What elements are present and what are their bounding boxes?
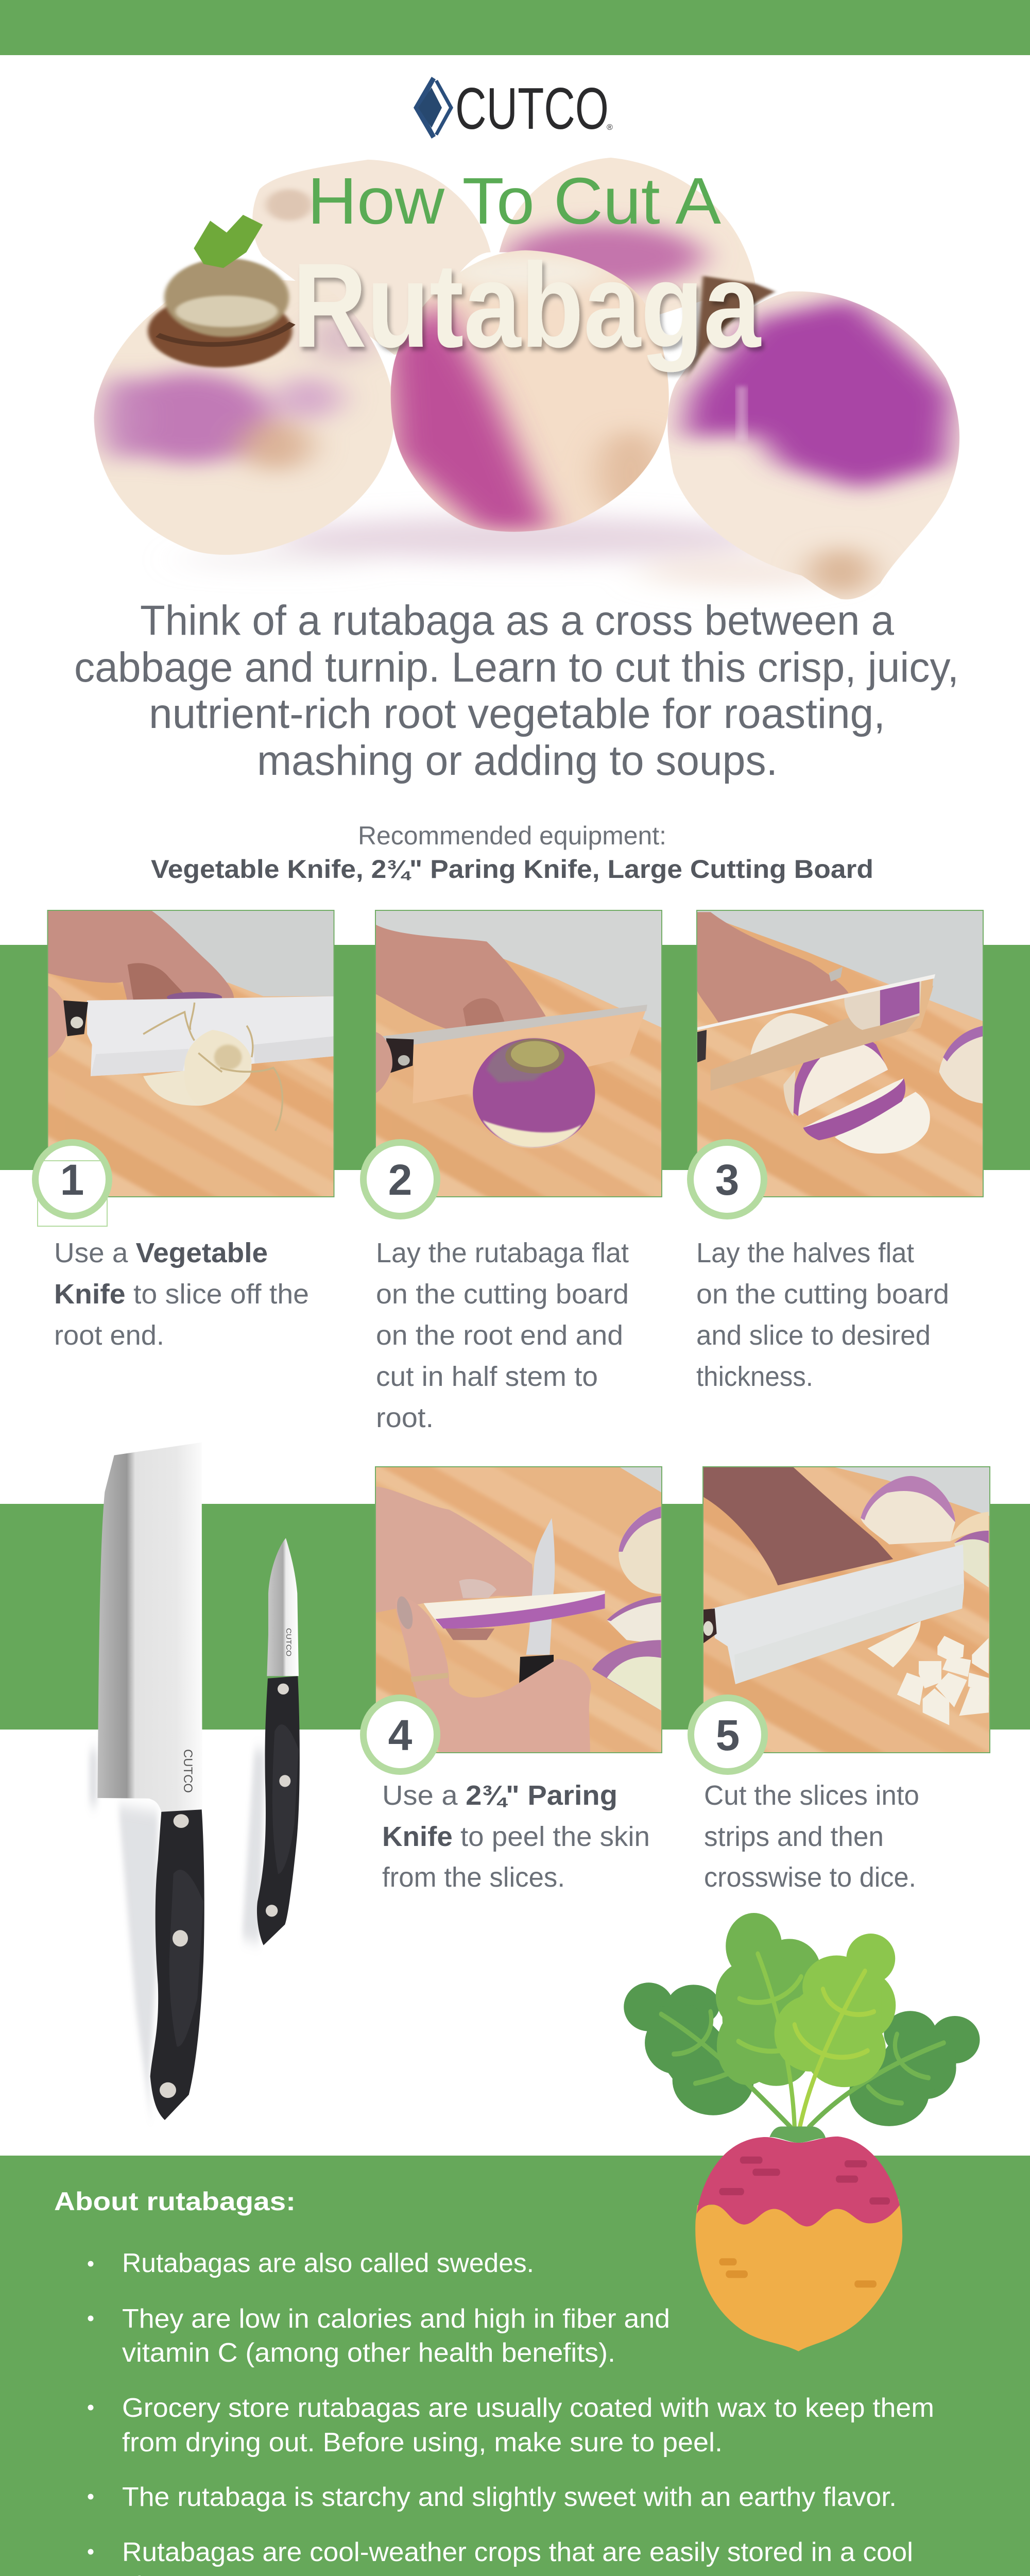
leaves on left rutabaga: [194, 215, 263, 268]
step 4 border: [375, 1467, 662, 1753]
about rutabagas heading: About rutabagas:: [54, 2187, 296, 2216]
vegetable knife blade: [97, 1443, 202, 1812]
step 3 photo: [665, 830, 1020, 1343]
skin marks: [719, 2157, 890, 2287]
step 3 panel: [665, 830, 1020, 1392]
step 2 text: root.: [376, 1402, 434, 1433]
paring knife handle: [257, 1676, 300, 1945]
step 1 text: Use a Vegetable: [54, 1238, 268, 1268]
right rutabaga: [660, 276, 969, 603]
heading: Rutabaga: Rutabaga: [293, 239, 762, 372]
left rutabaga: [85, 215, 407, 560]
step 2 border: [375, 910, 662, 1197]
step 2 text: on the root end and: [376, 1320, 623, 1351]
crown of right rutabaga: [683, 276, 775, 386]
step 5 text: Cut the slices into: [704, 1780, 919, 1811]
intro paragraph: Think of a rutabaga as a cross between a: [140, 597, 894, 644]
step 1 number badge: 1: [60, 1156, 84, 1204]
green band behind steps 1-3: [0, 945, 1030, 1170]
intro paragraph: nutrient-rich root vegetable for roasting,: [149, 690, 885, 737]
knife shadows: [89, 1750, 265, 2123]
step 5 text: strips and then: [704, 1821, 884, 1852]
step 1 text: [54, 1238, 309, 1351]
step 5 text: [704, 1780, 919, 1893]
crown of left rutabaga: [148, 258, 293, 367]
back left rutabaga: [252, 160, 491, 354]
step 2 text: cut in half stem to: [376, 1361, 598, 1392]
recommended equipment: Vegetable Knife, 2¾" Paring Knife, Large Cutting Board: [151, 855, 873, 884]
bullet 3: Grocery store rutabagas are usually coated with wax to keep them: [122, 2393, 934, 2423]
step 2 text: Lay the rutabaga flat: [376, 1238, 629, 1268]
step 5 number badge: [691, 1698, 764, 1771]
registered mark: ®: [607, 123, 613, 132]
knife engravings: [181, 1628, 293, 1793]
step 3 border: [697, 910, 983, 1197]
knives photo: [89, 1443, 300, 2123]
bullet 2: They are low in calories and high in fiber and: [122, 2304, 670, 2334]
green stem cap: [769, 2127, 826, 2143]
knife engravings: CUTCO: [285, 1628, 293, 1656]
body lower orange: [695, 2199, 902, 2351]
bullet 3: from drying out. Before using, make sure to peel.: [122, 2428, 723, 2458]
green band behind steps 4-5: [0, 1504, 1030, 1730]
step 2 panel: [360, 910, 662, 1427]
step 4 photo: [341, 1381, 696, 1894]
bullet 5: Rutabagas are cool-weather crops that are easily stored in a cool: [122, 2537, 913, 2567]
bullet 2: vitamin C (among other health benefits).: [122, 2338, 615, 2368]
step 5 panel: [671, 1381, 1025, 1894]
stray outline box: [38, 1161, 107, 1226]
step 2 text: [376, 1238, 629, 1433]
step 2 text: on the cutting board: [376, 1279, 629, 1310]
logo diamond: [414, 77, 453, 139]
heading: How To Cut A: How To Cut A: [307, 164, 722, 238]
body upper magenta: [697, 2137, 900, 2226]
step 3 text: on the cutting board: [696, 1279, 949, 1310]
middle green leaf: [716, 1913, 821, 2127]
about section background: [0, 2156, 1030, 2576]
bullet 1: Rutabagas are also called swedes.: [122, 2248, 534, 2278]
front light leaf: [775, 1934, 896, 2127]
paring knife blade: [267, 1538, 299, 1676]
left dark leaf: [624, 1982, 791, 2127]
top green bar: [0, 0, 1030, 55]
step 4 number badge: 4: [388, 1711, 413, 1759]
step 4 text: Use a 2¾" Paring: [382, 1780, 617, 1811]
step 5 photo: [671, 1381, 1025, 1894]
vegetable knife handle: [150, 1809, 204, 2120]
step 1 border: [47, 910, 334, 1197]
middle rutabaga: [381, 244, 677, 532]
logo wordmark: CUTCO: [455, 76, 609, 142]
step 5 number badge: 5: [716, 1711, 740, 1759]
recommended equipment: Recommended equipment:: [358, 821, 666, 850]
recommended equipment: [151, 821, 873, 884]
bullet 4: The rutabaga is starchy and slightly sweet with an earthy flavor.: [122, 2482, 897, 2512]
intro paragraph: cabbage and turnip. Learn to cut this crisp, juicy,: [74, 644, 959, 691]
step 3 text: and slice to desired: [696, 1320, 931, 1351]
step 3 number badge: 3: [715, 1156, 739, 1204]
step 4 text: [382, 1780, 650, 1893]
step 3 number badge: [690, 1143, 764, 1216]
intro paragraph: mashing or adding to soups.: [257, 737, 778, 784]
hero photo: rutabagas: [85, 154, 969, 603]
paring knife: [257, 1538, 300, 1945]
right dark leaf: [809, 2011, 980, 2127]
bullet 2: [88, 2304, 670, 2368]
step 1 photo: [48, 911, 334, 1196]
knife engravings: CUTCO: [181, 1749, 195, 1793]
bullet 3: [88, 2393, 934, 2458]
step 5 border: [703, 1467, 990, 1753]
step 1 number badge: [35, 1143, 109, 1216]
step 2 number badge: 2: [388, 1156, 412, 1204]
step 1 text: root end.: [54, 1320, 164, 1351]
step 3 text: thickness.: [696, 1361, 813, 1392]
step 4 text: from the slices.: [382, 1862, 565, 1893]
intro paragraph: [74, 597, 959, 784]
step 1 panel: [32, 910, 335, 1345]
step 2 photo: [341, 830, 696, 1343]
CUTCO logo: [414, 76, 613, 142]
step 3 text: [696, 1238, 949, 1392]
shadow under the vegetables: [177, 516, 847, 587]
about rutabagas list: [88, 2248, 934, 2576]
step 4 panel: [341, 1381, 696, 1894]
step 5 text: crosswise to dice.: [704, 1862, 916, 1893]
step 3 text: Lay the halves flat: [696, 1238, 914, 1268]
step 4 text: Knife to peel the skin: [382, 1821, 650, 1852]
vegetable knife: [97, 1443, 204, 2120]
step 2 number badge: [364, 1143, 437, 1216]
step 4 number badge: [364, 1698, 437, 1771]
back right rutabaga: [500, 158, 755, 314]
step 1 text: Knife to slice off the: [54, 1279, 309, 1310]
rutabaga illustration: [624, 1913, 980, 2351]
